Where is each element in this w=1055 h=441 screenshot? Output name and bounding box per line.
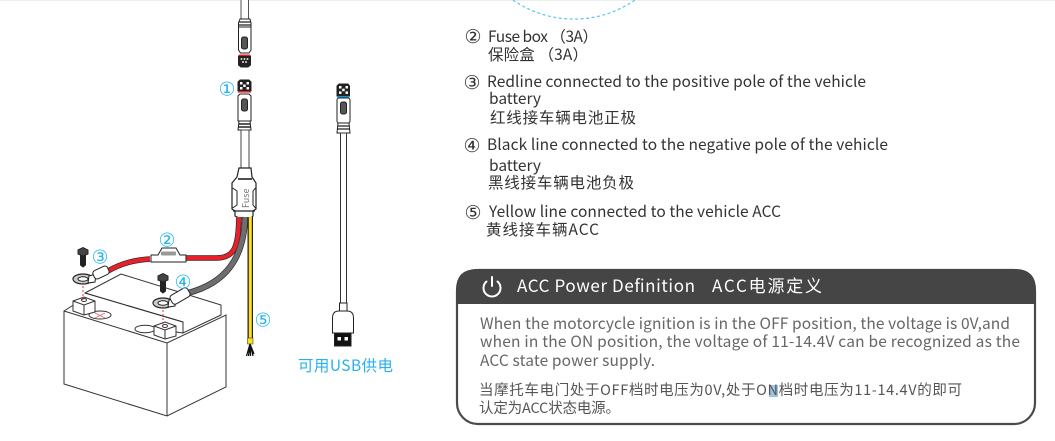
English definition text: ACC state power supply. (480, 349, 655, 371)
English definition text: when in the ON position, the voltage of 11-14.4V can be recognized as the (480, 330, 1020, 352)
upper connector (238, 0, 251, 67)
item 5: yellow line: Yellow line connected to the vehicle ACC (488, 200, 781, 222)
battery (64, 274, 226, 416)
positive ring terminal and screw (73, 248, 110, 300)
item 5: yellow line: ⑤ (464, 202, 482, 224)
item 4: black line: Black line connected to the negative pole of the vehicle (487, 133, 888, 155)
item 4: black line (463, 133, 888, 193)
English definition text (480, 312, 1020, 371)
item 4: black line: 黑线接车辆电池负极 (488, 171, 634, 193)
USB power cable (332, 84, 354, 346)
negative ring terminal and screw (153, 274, 191, 325)
panel header bar (456, 269, 1036, 304)
black negative wire (188, 217, 245, 293)
callout numbers on diagram: ① (218, 78, 236, 100)
callout numbers on diagram: ② (158, 230, 176, 252)
selection highlight (769, 385, 778, 397)
item 3: red line (463, 70, 866, 128)
callout numbers on diagram (91, 78, 272, 332)
item 4: black line: battery (489, 154, 541, 176)
callout numbers on diagram: ④ (174, 272, 192, 294)
callout numbers on diagram: ③ (91, 246, 109, 268)
Chinese definition text (479, 379, 962, 418)
English definition text: When the motorcycle ignition is in the OFF position, the voltage is 0V,and (480, 312, 1010, 334)
item 2: fuse box: 保险盒 （3A） (488, 43, 588, 65)
callout numbers on diagram: ⑤ (254, 310, 272, 332)
item 3: red line: 红线接车辆电池正极 (490, 106, 636, 128)
panel: ACC power definition (456, 269, 1036, 424)
Chinese definition text: 认定为ACC状态电源。 (479, 397, 620, 418)
panel frame (457, 270, 1035, 424)
item 2: fuse box: Fuse box （3A） (488, 25, 598, 47)
red positive wire with fuse box (108, 217, 239, 271)
Chinese definition text: 当摩托车电门处于OFF档时电压为0V,处于ON档时电压为11-14.4V的即可 (479, 379, 962, 400)
panel heading: ACC电源定义 (712, 272, 822, 297)
item 3: red line: Redline connected to the positive pole of the vehicle (487, 70, 866, 92)
dashed callout circle arc (513, 0, 635, 19)
yellow ACC wire (246, 217, 254, 356)
item 3: red line: battery (489, 87, 541, 109)
panel heading: ACC Power Definition (517, 272, 695, 297)
item 5: yellow line: 黄线接车辆ACC (486, 218, 599, 240)
panel heading (517, 272, 822, 297)
item 2: fuse box: ② (464, 26, 482, 48)
item 3: red line: ③ (463, 72, 481, 94)
item 4: black line: ④ (463, 135, 481, 157)
item 2: fuse box (464, 25, 598, 65)
lower connector with fuse block (232, 80, 256, 218)
USB caption: 可用USB供电 (298, 354, 393, 376)
item 5: yellow line (464, 200, 781, 240)
icon: power symbol (484, 277, 501, 296)
lower connector with fuse block: Fuse (239, 189, 252, 208)
